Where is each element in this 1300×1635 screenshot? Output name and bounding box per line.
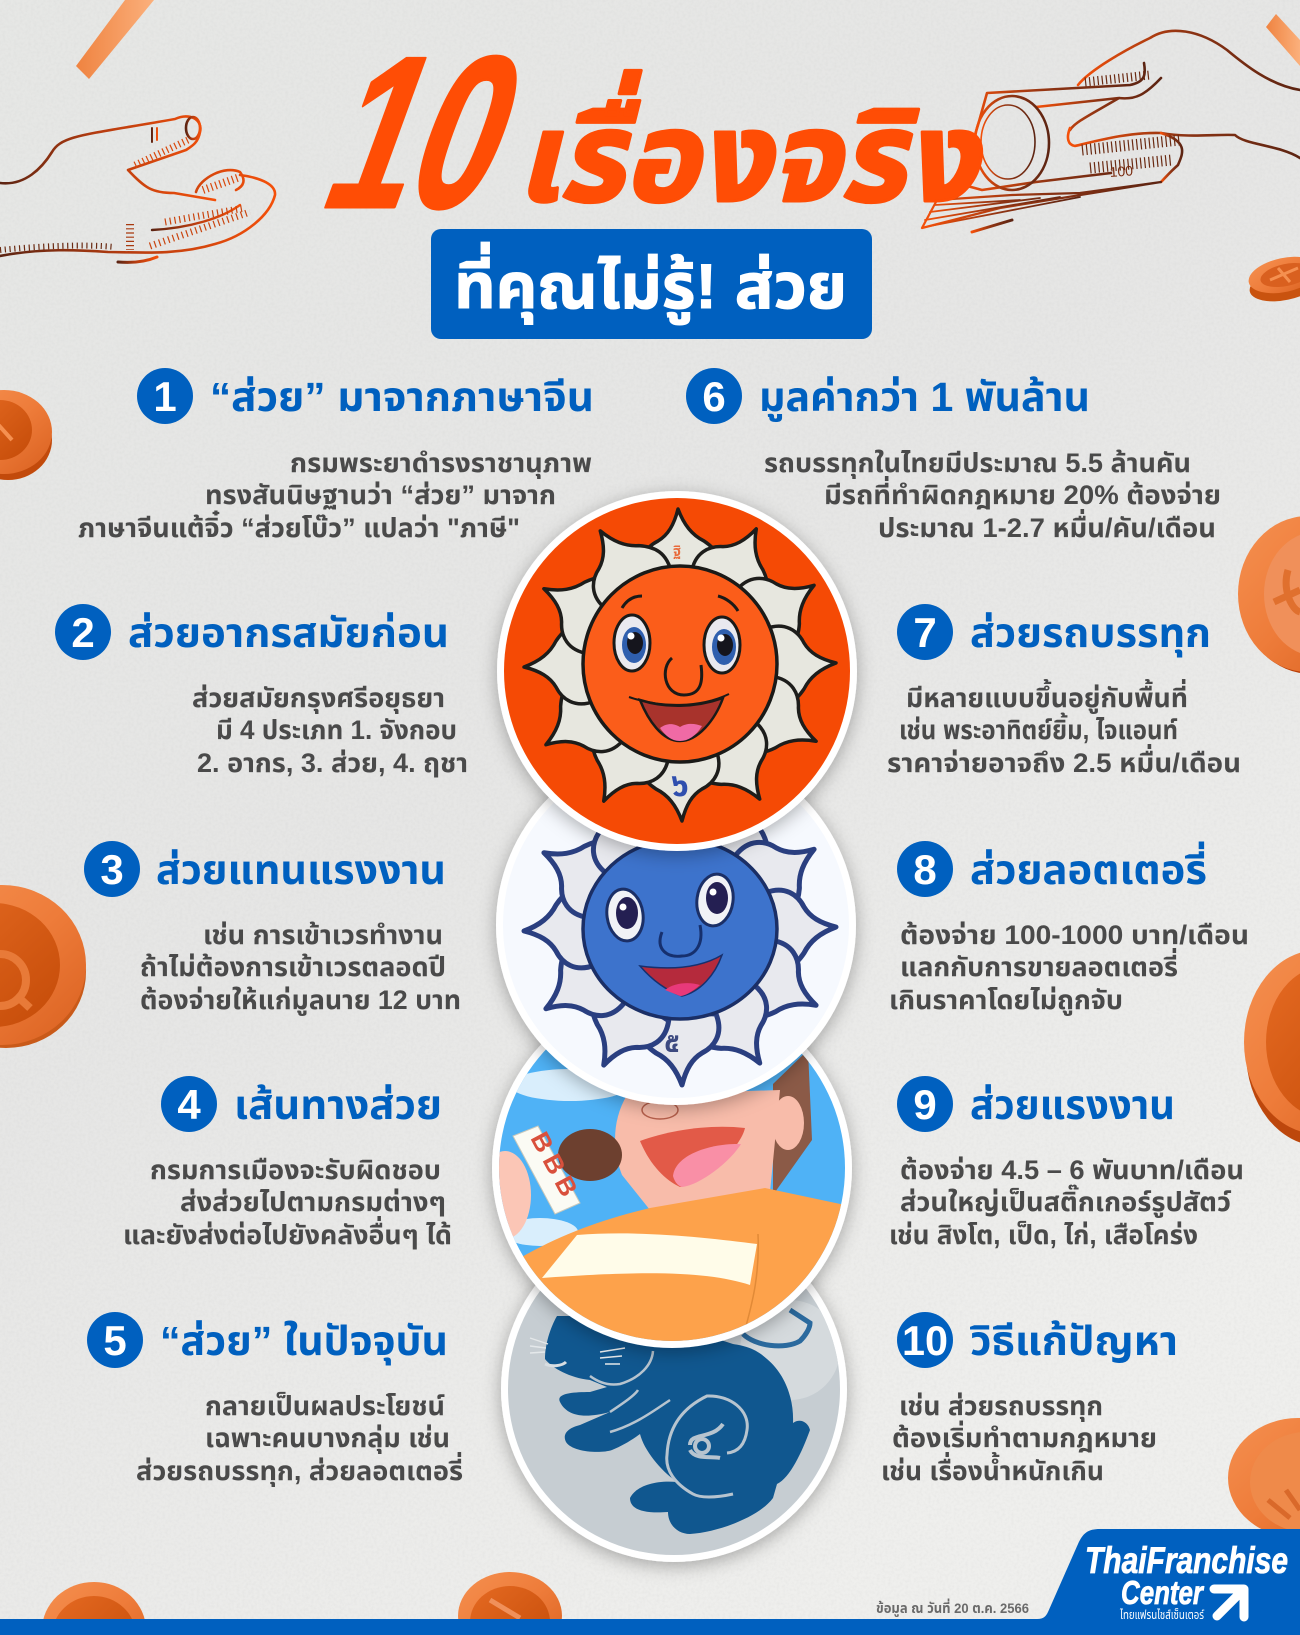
number badge 4: 4 — [177, 1081, 201, 1128]
coin: right upper — [1238, 516, 1300, 674]
title: เรื่องจริง — [516, 70, 983, 228]
decorative strip: top right — [1266, 14, 1300, 66]
image circle: blue rabbit sticker — [491, 1278, 857, 1576]
body 5: ส่วยรถบรรทุก, ส่วยลอตเตอรี่ — [136, 1452, 463, 1487]
body 10 — [881, 1391, 1157, 1486]
body 4 — [123, 1155, 452, 1250]
heading 4: เส้นทางส่วย — [234, 1082, 442, 1128]
body 9: เช่น สิงโต, เป็ด, ไก่, เสือโคร่ง — [889, 1220, 1198, 1250]
number badge 5 — [87, 1312, 143, 1368]
number badge 10: 10 — [902, 1317, 948, 1364]
body 3: ถ้าไม่ต้องการเข้าเวรตลอดปี — [140, 952, 446, 982]
body 8: ต้องจ่าย 100-1000 บาท/เดือน — [900, 920, 1249, 950]
coin: top right — [1245, 251, 1300, 307]
body 5: กลายเป็นผลประโยชน์ — [205, 1391, 445, 1421]
body 2: มี 4 ประเภท 1. จังกอบ — [216, 715, 457, 745]
number badge 4 — [161, 1076, 217, 1132]
footer bar and logo panel — [0, 1529, 1300, 1635]
coin: bottom middle — [458, 1572, 562, 1635]
decorative strip: top left — [76, 0, 154, 79]
number badge 8: 8 — [913, 846, 937, 893]
icon: giving hand with banknotes: 100 — [1109, 162, 1134, 180]
number badge 7: 7 — [913, 609, 937, 656]
body 4: กรมการเมืองจะรับผิดชอบ — [150, 1155, 441, 1185]
image circle: blue sun sticker: ๕ — [664, 1027, 680, 1058]
coin: left upper — [0, 390, 52, 480]
heading 2: ส่วยอากรสมัยก่อน — [128, 610, 449, 656]
number badge 8 — [897, 841, 953, 897]
body 4: และยังส่งต่อไปยังคลังอื่นๆ ได้ — [123, 1216, 452, 1250]
panel: fact 8 — [889, 841, 1249, 1016]
icon: logo arrow — [1214, 1589, 1244, 1617]
body 10: เช่น ส่วยรถบรรทุก — [899, 1391, 1103, 1422]
body 1 — [78, 448, 592, 543]
heading 5: “ส่วย” ในปัจจุบัน — [160, 1318, 448, 1366]
number badge 1 — [137, 368, 193, 424]
icon: giving hand with banknotes — [922, 31, 1300, 232]
body 10: ต้องเริ่มทำตามกฎหมาย — [892, 1421, 1157, 1453]
heading 3: ส่วยแทนแรงงาน — [156, 847, 446, 893]
heading 1: “ส่วย” มาจากภาษาจีน — [210, 374, 594, 420]
number badge 1: 1 — [153, 373, 177, 420]
number badge 9 — [897, 1076, 953, 1132]
image circle: cartoon man with microphone — [482, 1040, 862, 1360]
subtitle banner — [431, 229, 872, 339]
heading 9: ส่วยแรงงาน — [970, 1082, 1175, 1128]
body 9 — [889, 1155, 1244, 1250]
coin: right lower — [1228, 1418, 1300, 1538]
source credit: ข้อมูล ณ วันที่ 20 ต.ค. 2566 — [876, 1598, 1029, 1618]
number badge 5: 5 — [103, 1317, 127, 1364]
icon: receiving hand — [0, 116, 275, 262]
body 1: กรมพระยาดำรงราชานุภาพ — [290, 448, 592, 479]
number badge 6 — [686, 368, 742, 424]
logo: ThaiFranchise Center: Center — [1121, 1574, 1205, 1611]
body 4: ส่งส่วยไปตามกรมต่างๆ — [180, 1187, 446, 1217]
heading 6: มูลค่ากว่า 1 พันล้าน — [759, 374, 1090, 422]
image circle: orange sun sticker — [490, 485, 860, 855]
number badge 7 — [897, 604, 953, 660]
body 6: รถบรรทุกในไทยมีประมาณ 5.5 ล้านคัน — [764, 448, 1191, 479]
panel: fact 4 — [123, 1076, 452, 1250]
body 7: มีหลายแบบขึ้นอยู่กับพื้นที่ — [906, 679, 1188, 714]
body 5: เฉพาะคนบางกลุ่ม เช่น — [205, 1423, 450, 1454]
image circle: cartoon man with microphone: B — [549, 1171, 584, 1201]
image circle: blue sun sticker — [490, 740, 860, 1110]
body 10: เช่น เรื่องน้ำหนักเกิน — [881, 1452, 1104, 1486]
image circle: cartoon man with microphone: B — [537, 1149, 572, 1179]
number badge 2 — [55, 604, 111, 660]
body 6: มีรถที่ทำผิดกฎหมาย 20% ต้องจ่าย — [824, 476, 1221, 510]
panel: fact 6 — [686, 368, 1221, 543]
body 2: 2. อากร, 3. ส่วย, 4. ฤชา — [197, 748, 468, 778]
body 2: ส่วยสมัยกรุงศรีอยุธยา — [192, 683, 445, 714]
logo: ThaiFranchise Center: ไทยแฟรนไชส์เซ็นเตอร์ — [1119, 1608, 1204, 1622]
image circle: orange sun sticker: ฐิ — [673, 543, 681, 559]
body 3 — [140, 920, 461, 1016]
body 3: ต้องจ่ายให้แก่มูลนาย 12 บาท — [140, 985, 461, 1016]
body 9: ส่วนใหญ่เป็นสติ๊กเกอร์รูปสัตว์ — [900, 1185, 1232, 1218]
coin: bottom left — [42, 1582, 146, 1635]
body 8 — [889, 920, 1249, 1016]
image circle: cartoon man with microphone: B — [525, 1127, 560, 1157]
body 7 — [887, 679, 1241, 778]
panel: fact 7 — [887, 604, 1241, 778]
heading 7: ส่วยรถบรรทุก — [970, 610, 1211, 658]
number badge 9: 9 — [913, 1081, 937, 1128]
body 8: แลกกับการขายลอตเตอรี่ — [900, 948, 1178, 982]
panel: fact 9 — [889, 1076, 1244, 1250]
panel: fact 10 — [881, 1312, 1178, 1486]
body 1: ทรงสันนิษฐานว่า “ส่วย” มาจาก — [205, 480, 556, 510]
number badge 3: 3 — [100, 846, 124, 893]
body 6: ประมาณ 1-2.7 หมื่น/คัน/เดือน — [878, 509, 1216, 543]
body 3: เช่น การเข้าเวรทำงาน — [203, 920, 443, 950]
heading 10: วิธีแก้ปัญหา — [969, 1318, 1178, 1364]
body 7: เช่น พระอาทิตย์ยิ้ม, ไจแอนท์ — [899, 713, 1178, 745]
panel: fact 5 — [87, 1312, 463, 1487]
body 1: ภาษาจีนแต้จิ๋ว “ส่วยโบ๊ว” แปลว่า "ภาษี" — [78, 511, 520, 543]
title — [299, 12, 983, 253]
body 8: เกินราคาโดยไม่ถูกจับ — [889, 985, 1123, 1016]
panel: fact 3 — [84, 841, 461, 1016]
image circle: orange sun sticker: ๖ — [671, 766, 689, 804]
body 7: ราคาจ่ายอาจถึง 2.5 หมื่น/เดือน — [887, 744, 1241, 778]
body 2 — [192, 683, 468, 778]
body 9: ต้องจ่าย 4.5 – 6 พันบาท/เดือน — [900, 1155, 1244, 1185]
logo: ThaiFranchise Center — [1085, 1540, 1288, 1622]
number badge 3 — [84, 841, 140, 897]
subtitle banner: ที่คุณไม่รู้! ส่วย — [454, 242, 847, 325]
coin: right middle — [1244, 950, 1300, 1146]
heading 8: ส่วยลอตเตอรี่ — [970, 841, 1207, 893]
number badge 6: 6 — [702, 373, 726, 420]
coin: left middle — [0, 885, 86, 1048]
title: 10 — [299, 12, 553, 253]
number badge 2: 2 — [71, 609, 95, 656]
body 5 — [136, 1391, 463, 1487]
panel: fact 2 — [55, 604, 468, 778]
body 6 — [764, 448, 1221, 543]
panel: fact 1 — [78, 368, 594, 543]
